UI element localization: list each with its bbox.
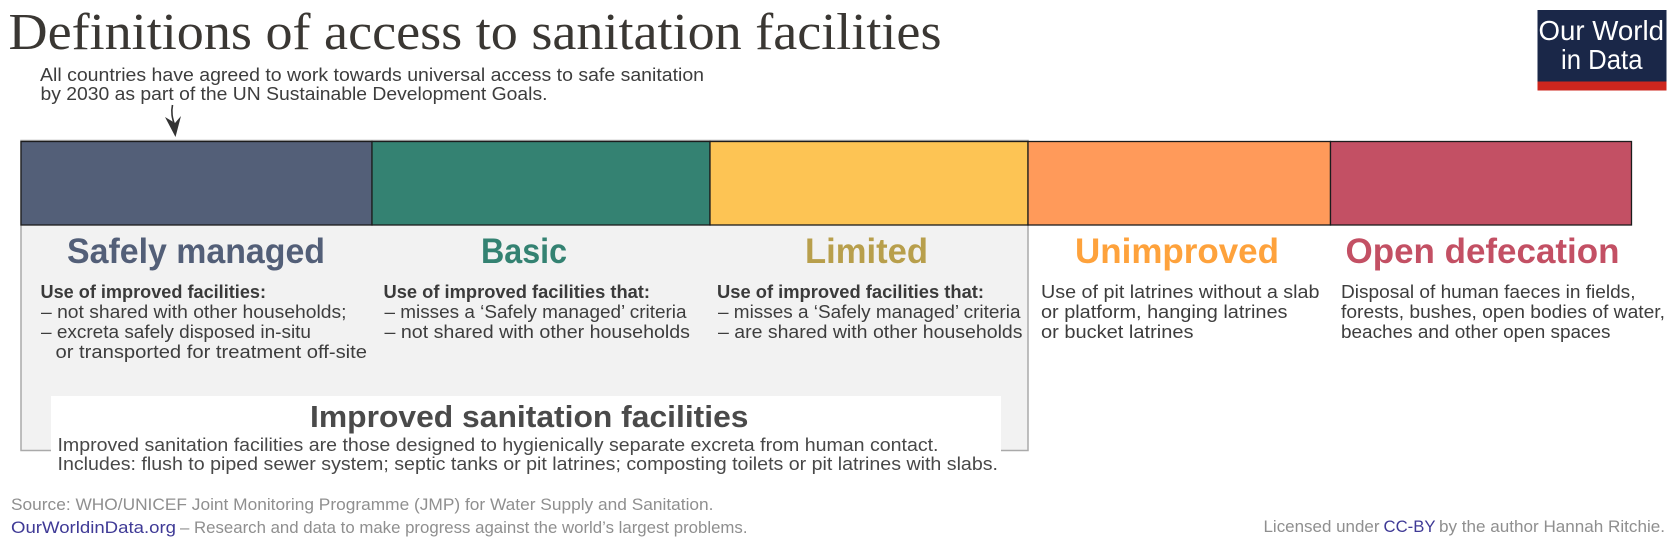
definition: Improved sanitation facilities: Includes: flush to piped sewer system; septic tanks or pit latrines; composting toilets or pit latrines with slabs.	[58, 454, 998, 474]
definition: Limited	[717, 282, 1022, 342]
source note: Source: WHO/UNICEF Joint Monitoring Programme (JMP) for Water Supply and Sanitation.	[11, 495, 714, 514]
logo: Our World in Data: in Data	[1561, 44, 1643, 75]
definition: Safely managed: or transported for treatment off-site	[56, 342, 367, 362]
heading: Open defecation: Open defecation	[1346, 232, 1620, 271]
panel: improved sanitation background	[21, 140, 1028, 471]
definition: Limited: – misses a ‘Safely managed’ criteria	[718, 302, 1022, 322]
definition: Unimproved: or bucket latrines	[1041, 322, 1194, 342]
definition: Open defecation	[1341, 282, 1665, 342]
column: Limited	[717, 232, 1022, 342]
definition: Unimproved: Use of pit latrines without a slab	[1041, 282, 1320, 302]
subtitle note: All countries have agreed to work towards universal access to safe sanitation	[40, 65, 704, 85]
definition: Basic: Use of improved facilities that:	[384, 282, 650, 302]
definition: Improved sanitation facilities: Improved sanitation facilities are those designed to hygienically separate excreta from human contact.	[58, 435, 939, 455]
subtitle note: by 2030 as part of the UN Sustainable Development Goals.	[40, 84, 548, 104]
colour bar: service ladder	[21, 142, 1632, 225]
heading: Improved sanitation facilities: Improved sanitation facilities	[310, 399, 748, 434]
column: Unimproved	[1041, 232, 1320, 342]
definition: Basic: – misses a ‘Safely managed’ criteria	[384, 302, 688, 322]
definition: Open defecation: beaches and other open spaces	[1341, 322, 1610, 342]
definition: Unimproved: or platform, hanging latrines	[1041, 302, 1288, 322]
column: Open defecation	[1341, 232, 1665, 342]
footer: OurWorldinData tagline: – Research and data to make progress against the world’s largest problems.	[180, 518, 748, 537]
definition: Open defecation: Disposal of human faeces in fields,	[1341, 282, 1636, 302]
definition: Limited: Use of improved facilities that:	[717, 282, 984, 302]
column: Basic	[384, 232, 690, 342]
logo: Our World in Data: Our World	[1538, 15, 1664, 46]
heading: Basic: Basic	[481, 232, 567, 271]
footer: licence: by the author Hannah Ritchie.	[1439, 517, 1665, 536]
definition: Basic: – not shared with other households	[384, 322, 690, 342]
definition: Safely managed	[40, 282, 367, 362]
footer: OurWorldinData tagline: OurWorldinData.org	[11, 518, 176, 537]
title: Definitions of access to sanitation facilities	[8, 4, 942, 61]
definition: Safely managed: – excreta safely disposed in-situ	[41, 322, 311, 342]
definition: Safely managed: Use of improved facilities:	[40, 282, 266, 302]
column: Safely managed	[40, 232, 367, 362]
definition: Limited: – are shared with other households	[718, 322, 1022, 342]
subtitle note	[40, 65, 704, 104]
heading: Limited: Limited	[805, 232, 928, 271]
logo: Our World in Data	[1538, 10, 1666, 90]
heading: Unimproved: Unimproved	[1075, 232, 1279, 271]
footer: licence	[1264, 517, 1665, 536]
definition: Unimproved	[1041, 282, 1320, 342]
definition: Improved sanitation facilities	[58, 435, 998, 474]
definition: Safely managed: – not shared with other households;	[41, 302, 346, 322]
footer: licence: Licensed under	[1264, 517, 1380, 536]
definition: Open defecation: forests, bushes, open bodies of water,	[1341, 302, 1665, 322]
arrow: note to Safely managed	[165, 105, 181, 137]
definition: Basic	[384, 282, 690, 342]
footer: licence: CC-BY	[1384, 517, 1436, 536]
heading: Safely managed: Safely managed	[67, 232, 325, 271]
